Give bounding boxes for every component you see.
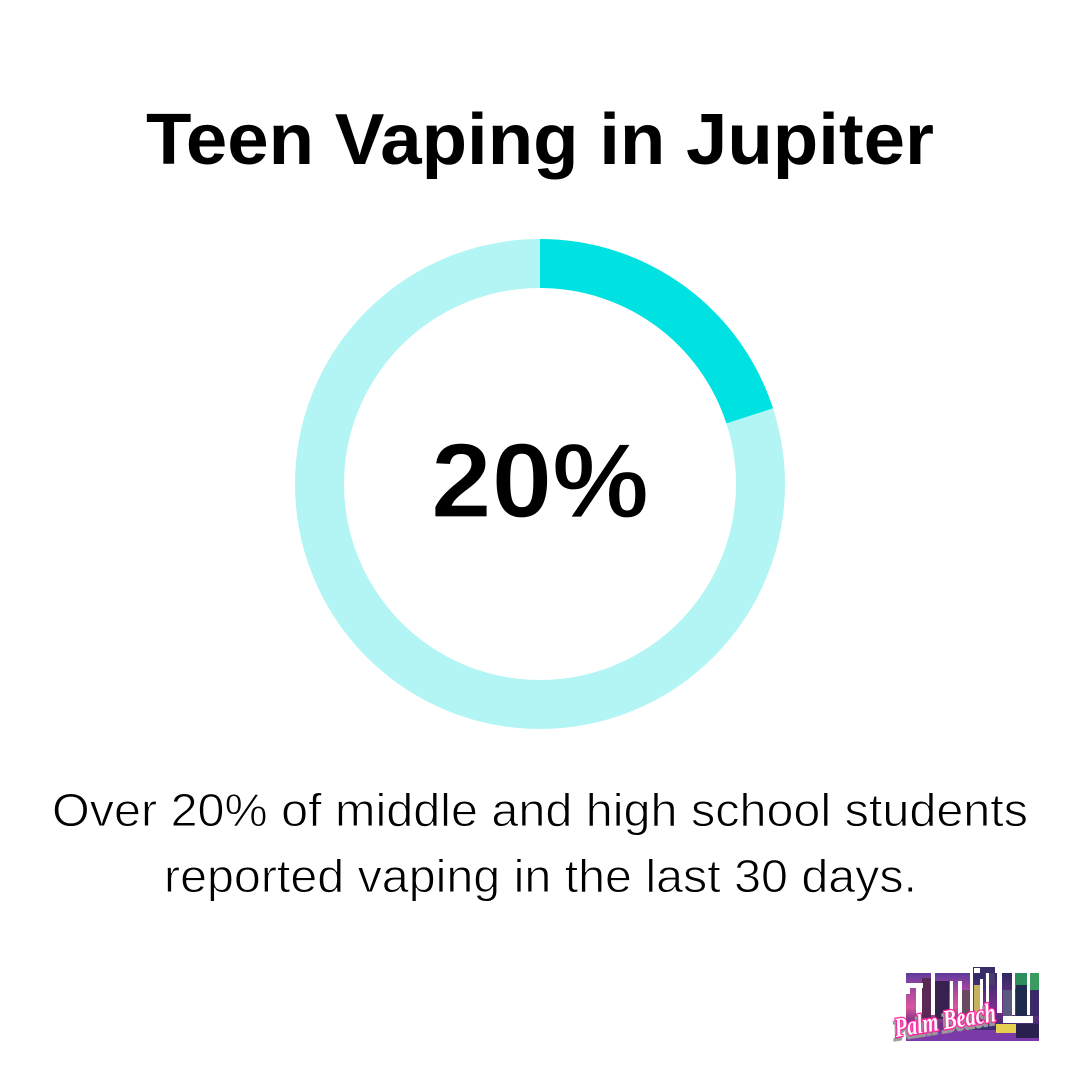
- description text: reported vaping in the last 30 days.: [164, 850, 917, 902]
- title: Teen Vaping in Jupiter: [146, 100, 934, 180]
- center value: 20%: [431, 422, 649, 540]
- logo image block: [906, 967, 1039, 1041]
- logo script: Palm Beach: Palm Beach: [892, 997, 998, 1043]
- logo white letter gaps: [906, 968, 1033, 1023]
- donut track: [320, 264, 760, 704]
- description text: [52, 784, 1028, 902]
- donut highlighted segment: [540, 239, 773, 423]
- description text: Over 20% of middle and high school students: [52, 784, 1028, 836]
- donut chart: 20%: [320, 239, 773, 704]
- logo: Amity Palm Beach: [892, 967, 1039, 1043]
